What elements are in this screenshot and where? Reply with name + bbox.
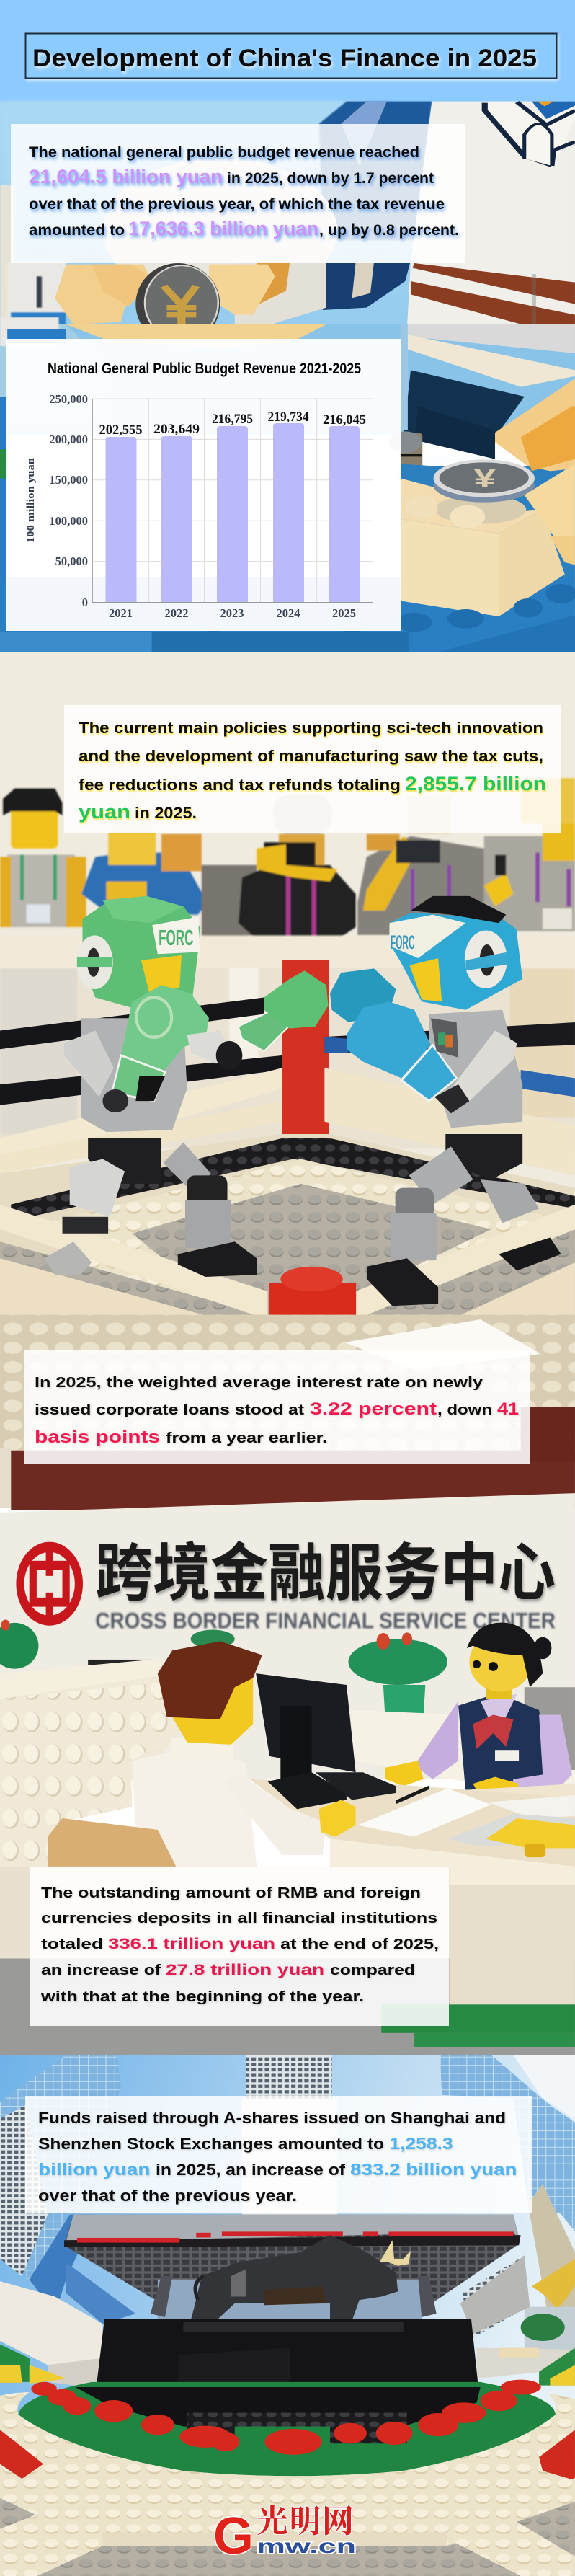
illustration: coin stack on cream brick	[0, 317, 575, 652]
y axis labels	[49, 392, 88, 609]
panel: loans text: 3.22 percent	[310, 1399, 437, 1419]
panel: A-shares text	[25, 2096, 532, 2213]
illustration: Lego bull in front of the stock exchange	[0, 2055, 575, 2576]
title: Development of China's Finance in 2025	[32, 45, 537, 72]
panel: loans text: 41	[497, 1399, 519, 1419]
bar values: 202,555	[99, 422, 143, 438]
illustration: coin stack on cream brick: ¥	[473, 464, 496, 494]
panel: tax cuts text: in 2025.	[135, 804, 197, 822]
panel: revenue text: in 2025, down by 1.7 percent	[227, 170, 434, 187]
logo: gmw.cn: G	[213, 2508, 254, 2565]
green robot	[44, 896, 328, 1277]
panel: stock exchange section	[0, 2055, 575, 2576]
sign English: CROSS BORDER FINANCIAL SERVICE CENTER	[95, 1608, 556, 1634]
studs	[195, 584, 575, 650]
panel: loans text: , down	[437, 1402, 492, 1418]
panel: loans text	[24, 1350, 530, 1464]
y axis labels: 50,000	[55, 554, 88, 568]
building side	[407, 324, 575, 353]
panel: budget revenue section	[0, 102, 575, 652]
panel: tax cuts section	[0, 652, 575, 1320]
panel: A-shares text: in 2025, an increase of	[156, 2161, 346, 2179]
cream base	[0, 2392, 575, 2546]
panel: revenue text	[11, 124, 465, 263]
front rails	[0, 1205, 267, 1319]
green robot: FORC	[159, 926, 193, 951]
panel: tax cuts text: 2,855.7 billion	[405, 773, 546, 795]
side towers	[0, 2055, 121, 2280]
blue building arm	[319, 102, 432, 240]
panel: A-shares text: 833.2 billion yuan	[350, 2160, 517, 2179]
exchange building	[64, 2215, 520, 2310]
y axis title: 100 million yuan	[25, 457, 37, 543]
grey floor	[0, 1958, 575, 2073]
coins	[400, 433, 422, 497]
gray plate	[0, 2498, 575, 2576]
left plinth	[0, 2281, 102, 2365]
panel: A-shares text: over that of the previous year.	[38, 2187, 297, 2205]
logo: gmw.cn	[213, 2504, 356, 2565]
panel: tax cuts text: The current main policies supporting sci-tech innovation	[79, 719, 543, 737]
panel: tax cuts text: and the development of manufacturing saw the tax cuts,	[79, 747, 543, 765]
x axis labels	[109, 606, 356, 620]
panel: banking section	[0, 1315, 575, 2073]
bar chart: National General Public Budget Revenue 2021-2025	[6, 339, 401, 631]
panel: revenue text: , up by 0.8 percent.	[319, 222, 459, 239]
title	[26, 33, 556, 78]
back counter	[352, 1710, 575, 1802]
panel: loans text: basis points	[35, 1428, 160, 1447]
bar values: 216,795	[212, 412, 253, 427]
panel: deposits text: compared	[330, 1962, 415, 1978]
header band	[0, 0, 575, 102]
silver coin	[434, 495, 526, 524]
x axis labels: 2025	[332, 606, 356, 620]
bull	[191, 2235, 411, 2321]
bar values: 219,734	[268, 410, 309, 425]
panel: A-shares text: Funds raised through A-shares issued on Shanghai and	[38, 2109, 506, 2127]
panel: deposits text: at the end of 2025,	[280, 1937, 439, 1952]
y axis labels: 100,000	[49, 514, 88, 528]
cream brick	[401, 519, 499, 616]
panel: loans text: from a year earlier.	[166, 1430, 327, 1446]
logo	[20, 1547, 79, 1621]
panel: deposits text: The outstanding amount of RMB and foreign	[41, 1885, 421, 1901]
panel: deposits text: 336.1 trillion yuan	[108, 1936, 275, 1952]
illustration: Lego boxing robots in a ring	[0, 652, 575, 1320]
panel: A-shares text: billion yuan	[38, 2160, 150, 2179]
lower counter area	[0, 1867, 449, 1963]
white wall	[0, 1493, 575, 1779]
panel: revenue text: 21,604.5 billion yuan	[29, 166, 223, 187]
panel: A-shares text: Shenzhen Stock Exchanges amounted to	[38, 2135, 384, 2153]
y axis labels: 200,000	[49, 433, 88, 446]
red post	[282, 960, 329, 1142]
chart title: National General Public Budget Revenue 2021-2025	[48, 360, 361, 377]
illustration: Lego bank counter	[0, 1315, 575, 2073]
bar values: 216,045	[323, 412, 366, 428]
blue base	[0, 577, 575, 652]
y axis labels: 250,000	[49, 392, 88, 406]
panel: deposits text: 27.8 trillion yuan	[166, 1962, 324, 1978]
y axis labels: 0	[82, 596, 88, 609]
x axis labels: 2024	[277, 606, 300, 620]
panel: deposits text: with that at the beginning of the year.	[40, 1989, 364, 2005]
panel: tax cuts text: yuan	[79, 801, 130, 823]
panel: tax cuts text	[64, 705, 561, 833]
floor	[0, 1134, 575, 1319]
monitor	[256, 1673, 356, 1772]
panel: A-shares text: 1,258.3	[389, 2134, 453, 2153]
panel: deposits text: totaled	[41, 1937, 103, 1952]
panel: revenue text: 17,636.3 billion yuan	[128, 218, 318, 239]
customer	[48, 1641, 356, 1867]
panel: tax cuts text: fee reductions and tax refunds totaling	[79, 776, 401, 794]
ceiling	[0, 1315, 575, 1453]
fingers	[55, 265, 154, 324]
illustration: robot hand holding a yuan coin	[0, 102, 575, 423]
counter	[330, 1784, 575, 1913]
bar values: 203,649	[153, 422, 200, 437]
x axis labels: 2023	[220, 606, 244, 620]
x axis labels: 2022	[164, 606, 189, 620]
teller	[385, 1623, 572, 1805]
bar values	[99, 410, 366, 438]
flowers	[31, 2380, 541, 2455]
logo: gmw.cn: 光明网	[257, 2504, 354, 2539]
panel: revenue text: over that of the previous year, of which the tax revenue	[29, 196, 445, 213]
panel: deposits text	[30, 1867, 449, 2026]
big fingers	[495, 379, 575, 471]
coin	[135, 263, 220, 345]
ropes	[0, 998, 264, 1049]
wall	[405, 102, 575, 360]
left studded wall	[0, 1660, 179, 1963]
spectators	[0, 778, 575, 939]
blue robot: FORC	[391, 932, 415, 953]
pedestal	[96, 2319, 478, 2413]
bars	[105, 423, 360, 602]
panel: revenue text: The national general public budget revenue reached	[29, 144, 419, 161]
logo: gmw.cn: mw.cn	[257, 2535, 356, 2557]
panel: loans text: issued corporate loans stood at	[35, 1402, 304, 1418]
y axis labels: 150,000	[49, 473, 88, 487]
plants	[0, 1623, 38, 1669]
blue robot	[330, 896, 561, 1306]
sign Chinese: 跨境金融服务中心	[95, 1538, 556, 1608]
panel: loans text: In 2025, the weighted average interest rate on newly	[35, 1375, 483, 1391]
panel: deposits text: an increase of	[41, 1962, 161, 1978]
x axis labels: 2021	[109, 606, 133, 620]
panel: revenue text: amounted to	[29, 222, 125, 239]
back of ring	[0, 966, 575, 1148]
panel: deposits text: currencies deposits in all financial institutions	[41, 1911, 437, 1926]
tiny studs	[11, 312, 66, 327]
flowerbed	[18, 2382, 556, 2476]
